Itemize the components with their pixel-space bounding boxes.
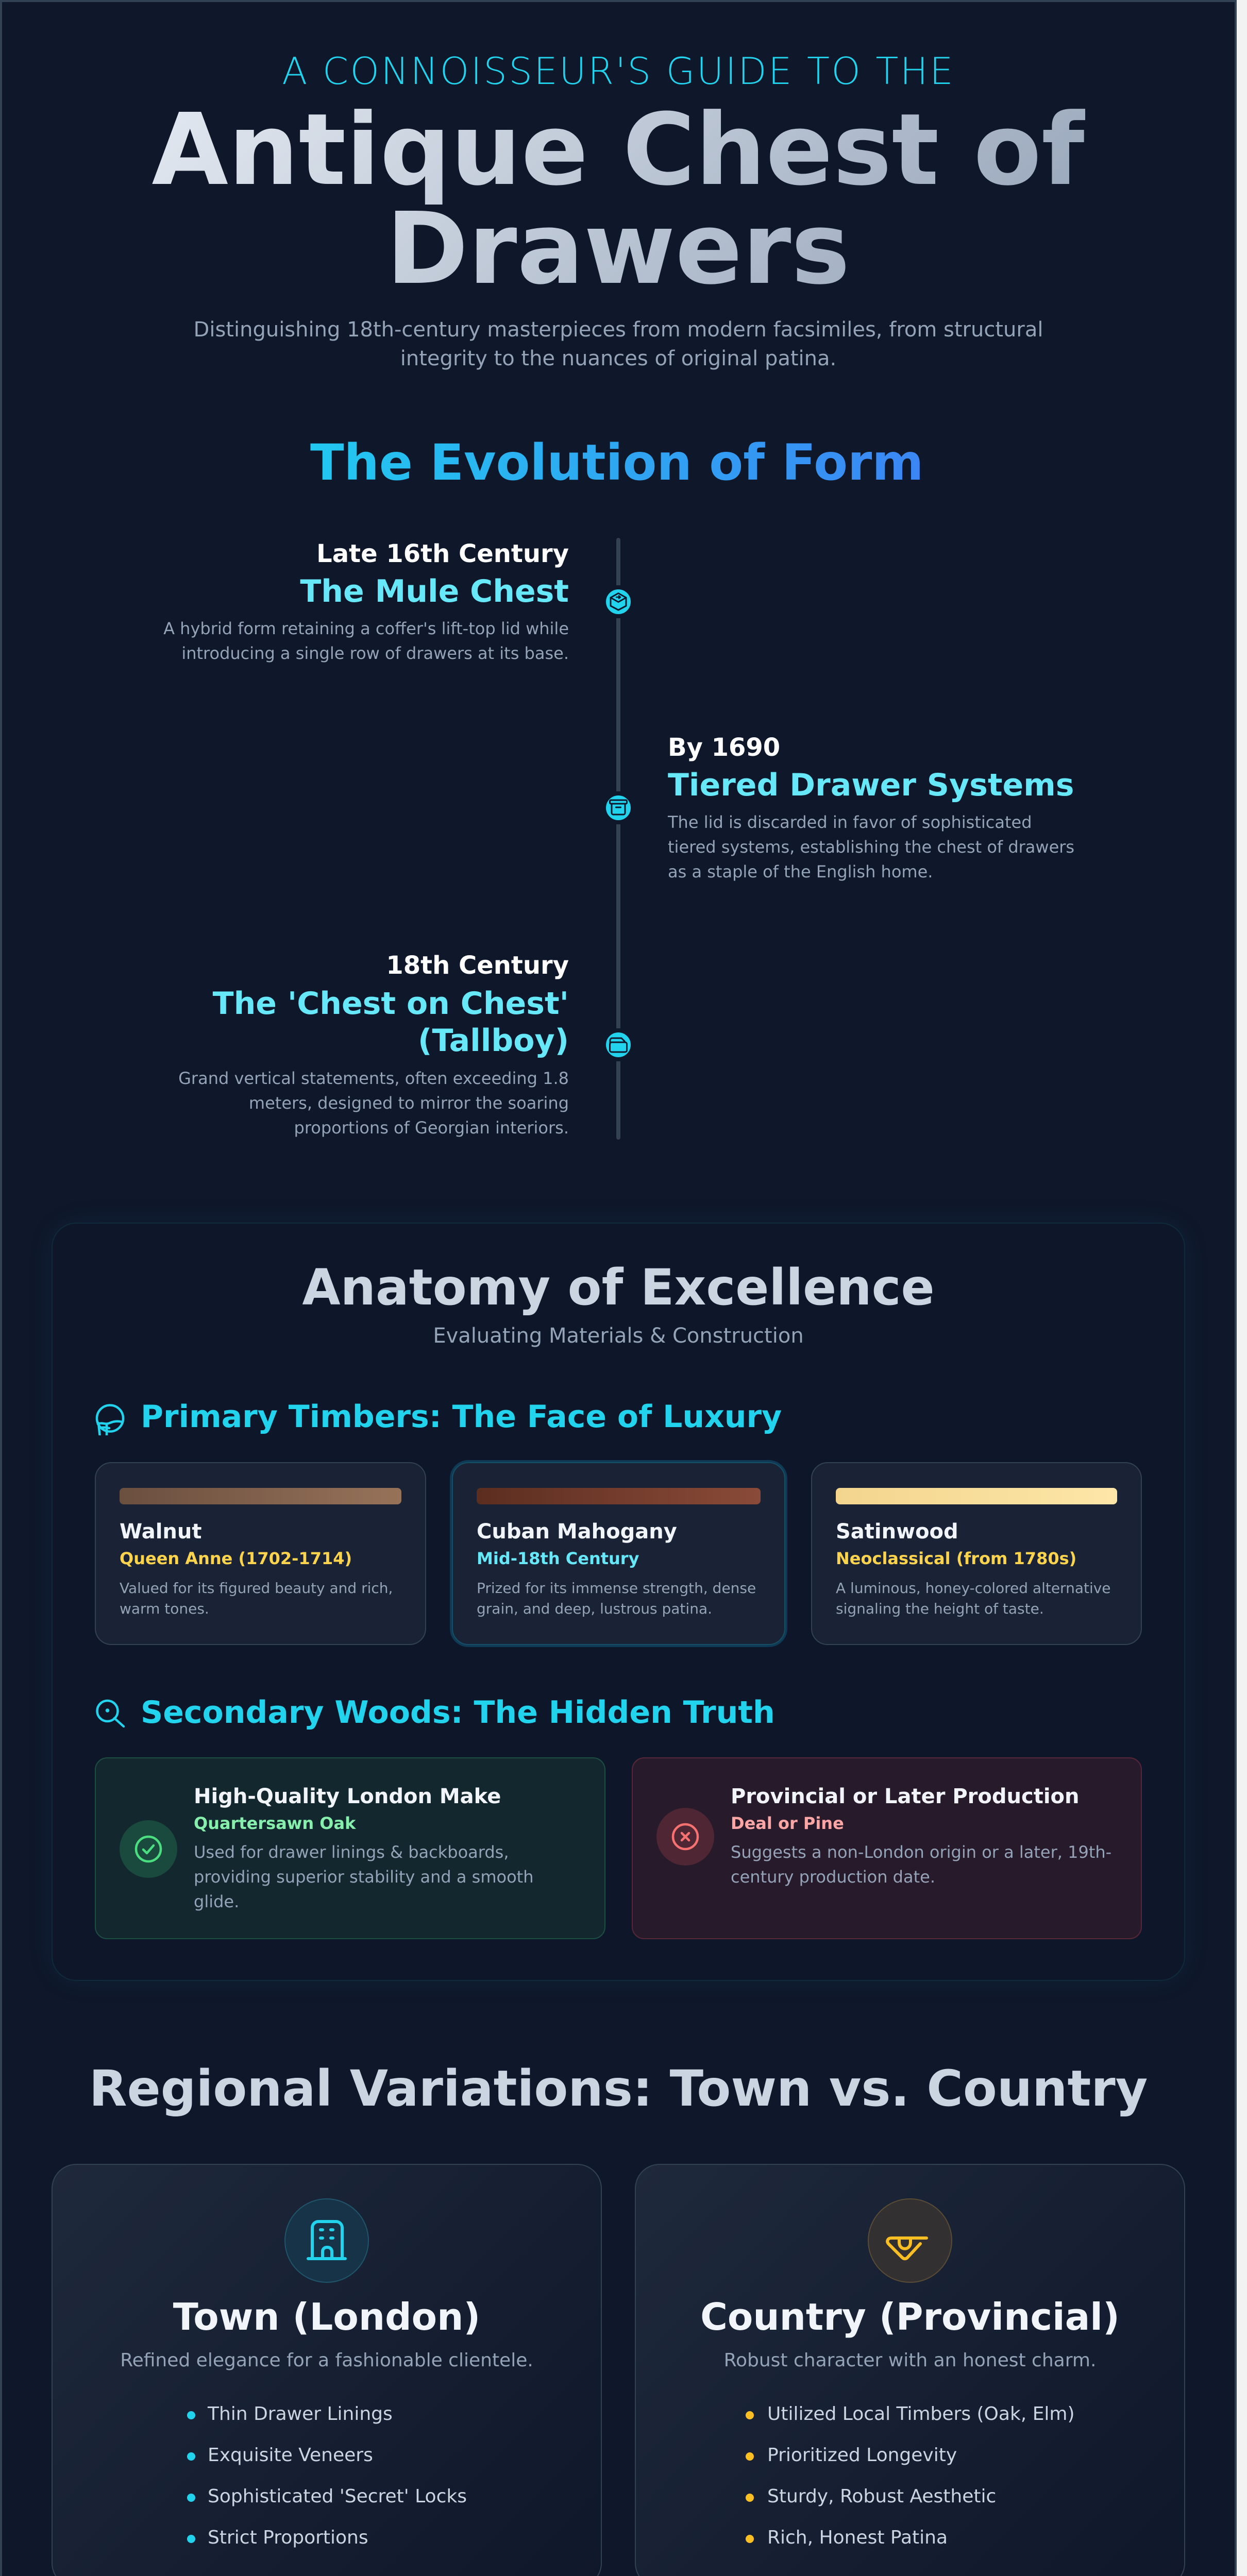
card: walnut: Queen Anne (1702-1714): [120, 1549, 352, 1568]
card: provincial or later: century production date.: [731, 1867, 935, 1887]
country list: Utilized Local Timbers (Oak, Elm): [767, 2403, 1075, 2425]
card: cuban mahogany: Mid-18th Century: [477, 1549, 639, 1568]
heading: secondary woods: Secondary Woods: The Hidden Truth: [141, 1694, 775, 1731]
country list: Sturdy, Robust Aesthetic: [767, 2486, 996, 2507]
country list: [746, 2403, 1075, 2548]
timeline entry: chest on chest: 18th Century: [386, 951, 569, 980]
timeline entry: tiered drawer systems: Tiered Drawer Systems: [668, 767, 1074, 803]
card: satinwood: Satinwood: [836, 1520, 958, 1544]
icon: cross: [656, 1808, 714, 1866]
timeline entry: tiered drawer systems: [668, 733, 1074, 882]
icon: country bowl: [868, 2198, 952, 2283]
main title: [151, 101, 1085, 299]
timeline entry: chest on chest: proportions of Georgian interiors.: [294, 1118, 569, 1138]
card: london make: [95, 1757, 605, 1939]
timeline entry: tiered drawer systems: tiered systems, establishing the chest of drawers: [668, 837, 1074, 857]
card: london make: High-Quality London Make: [194, 1785, 501, 1808]
card: cuban mahogany: grain, and deep, lustrous patina.: [477, 1600, 712, 1617]
timeline entry: chest on chest: meters, designed to mirror the soaring: [249, 1093, 569, 1113]
swatch: mahogany: [477, 1488, 761, 1504]
card: cuban mahogany: Cuban Mahogany: [477, 1520, 677, 1544]
timeline entry: chest on chest: [178, 951, 569, 1138]
heading: regional variations: Regional Variations: Town vs. Country: [89, 2060, 1148, 2117]
card: walnut: [95, 1462, 426, 1645]
swatch: satinwood: [836, 1488, 1117, 1504]
icon: cube node: [602, 585, 635, 618]
subtitle: [194, 318, 1043, 370]
card: walnut: Walnut: [120, 1520, 201, 1544]
town list: Strict Proportions: [208, 2527, 368, 2548]
heading: evolution of form: The Evolution of Form: [310, 434, 923, 492]
town list: [187, 2403, 467, 2548]
town list: Sophisticated 'Secret' Locks: [208, 2486, 467, 2507]
icon: building: [284, 2198, 369, 2283]
heading: primary timbers: Primary Timbers: The Face of Luxury: [141, 1399, 782, 1435]
timeline entry: chest on chest: Grand vertical statements, often exceeding 1.8: [178, 1069, 569, 1088]
card: provincial or later: [632, 1757, 1142, 1939]
main title: Drawers: [386, 192, 850, 307]
timeline entry: the mule chest: A hybrid form retaining a coffer's lift-top lid while: [163, 619, 569, 638]
icon: check: [120, 1820, 177, 1878]
timeline entry: the mule chest: The Mule Chest: [300, 573, 569, 609]
card: satinwood: Neoclassical (from 1780s): [836, 1549, 1076, 1568]
card: london make: Used for drawer linings & backboards,: [194, 1842, 509, 1862]
card: london make: glide.: [194, 1892, 239, 1911]
subtitle: Distinguishing 18th-century masterpieces from modern facsimiles, from structural: [194, 318, 1043, 342]
subtitle: integrity to the nuances of original patina.: [400, 347, 836, 370]
town title: Town (London): [173, 2295, 480, 2338]
timeline axis: [616, 538, 620, 1140]
timeline entry: the mule chest: Late 16th Century: [316, 539, 569, 568]
timeline entry: tiered drawer systems: By 1690: [668, 733, 780, 762]
timeline entry: the mule chest: [163, 539, 569, 663]
icon: primary timbers: [96, 1404, 125, 1435]
timeline entry: chest on chest: (Tallboy): [418, 1023, 569, 1059]
card: satinwood: A luminous, honey-colored alternative: [836, 1580, 1111, 1597]
country list: Prioritized Longevity: [767, 2445, 957, 2466]
town list: Thin Drawer Linings: [208, 2403, 393, 2425]
icon: magnifier: [96, 1699, 125, 1728]
country title: Country (Provincial): [700, 2295, 1120, 2338]
anatomy subheading: Evaluating Materials & Construction: [433, 1324, 804, 1348]
card: london make: providing superior stability and a smooth: [194, 1867, 534, 1887]
card: provincial or later: Provincial or Later Production: [731, 1785, 1079, 1808]
card: town: [52, 2164, 602, 2576]
card: satinwood: signaling the height of taste.: [836, 1600, 1044, 1617]
timeline entry: tiered drawer systems: The lid is discarded in favor of sophisticated: [668, 812, 1032, 832]
card: satinwood: [811, 1462, 1142, 1645]
icon: archive box node: [602, 791, 635, 824]
card: cuban mahogany: [452, 1462, 785, 1645]
header eyebrow: A CONNOISSEUR'S GUIDE TO THE: [282, 49, 955, 93]
heading: anatomy of excellence: Anatomy of Excellence: [302, 1259, 935, 1316]
country tagline: Robust character with an honest charm.: [724, 2350, 1096, 2371]
icon: tray node: [602, 1028, 635, 1061]
town tagline: Refined elegance for a fashionable clientele.: [120, 2350, 533, 2371]
country list: Rich, Honest Patina: [767, 2527, 948, 2548]
card: london make: Quartersawn Oak: [194, 1814, 356, 1833]
timeline entry: tiered drawer systems: as a staple of the English home.: [668, 862, 933, 882]
town list: Exquisite Veneers: [208, 2445, 373, 2466]
card: provincial or later: Suggests a non-London origin or a later, 19th-: [731, 1842, 1111, 1862]
panel: anatomy of excellence: [52, 1223, 1185, 1981]
card: cuban mahogany: Prized for its immense strength, dense: [477, 1580, 756, 1597]
timeline entry: the mule chest: introducing a single row of drawers at its base.: [181, 643, 569, 663]
card: walnut: warm tones.: [120, 1600, 209, 1617]
card: walnut: Valued for its figured beauty and rich,: [120, 1580, 393, 1597]
timeline: [616, 538, 620, 1140]
timeline entry: chest on chest: The 'Chest on Chest': [213, 986, 569, 1022]
card: country: [635, 2164, 1185, 2576]
card: provincial or later: Deal or Pine: [731, 1814, 844, 1833]
swatch: walnut: [120, 1488, 401, 1504]
main title: Antique Chest of: [151, 93, 1085, 208]
